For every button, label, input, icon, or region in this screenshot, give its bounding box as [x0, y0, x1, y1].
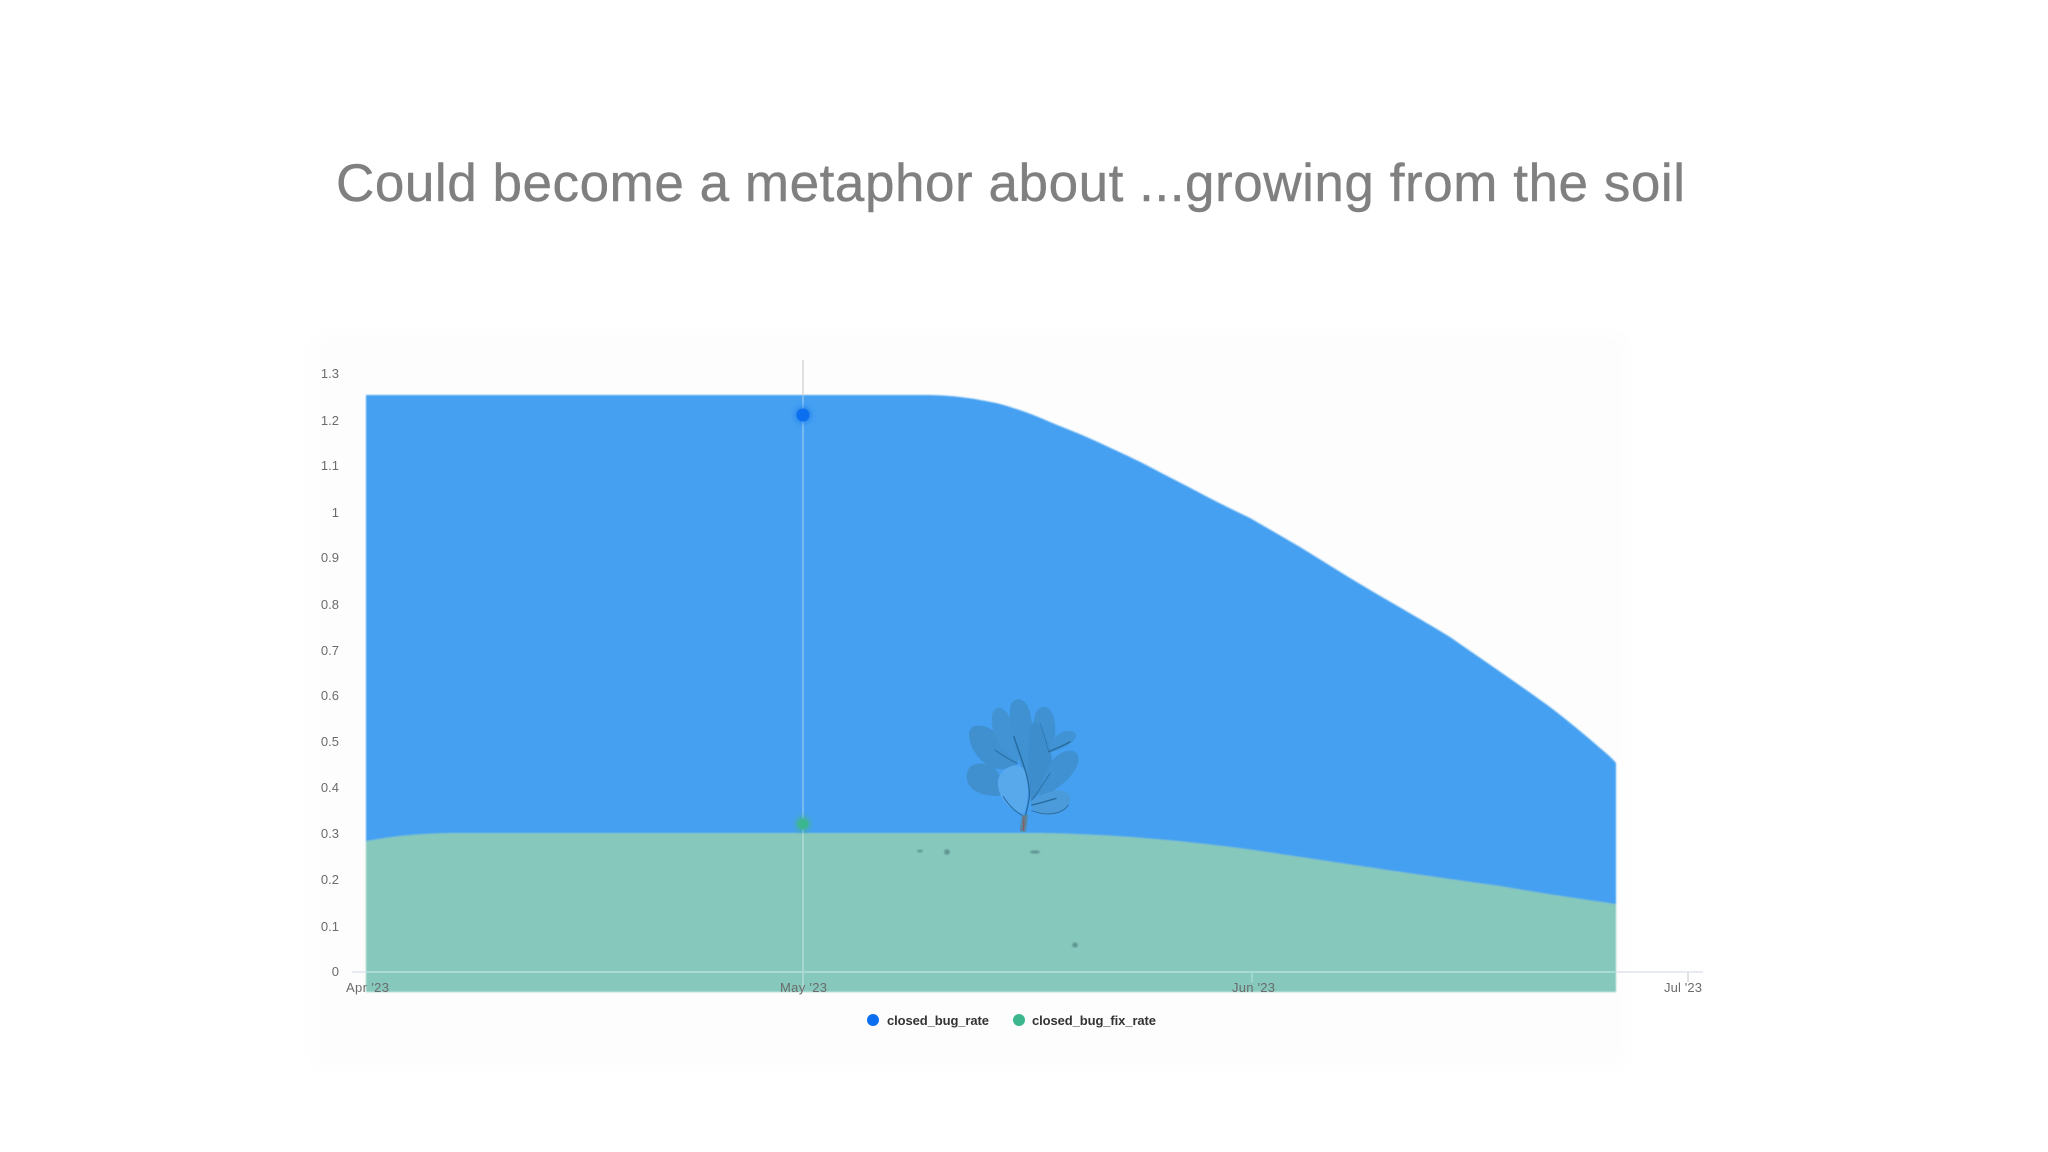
y axis labels: 1.1 — [321, 458, 339, 473]
chart: stacked area — [366, 395, 1616, 992]
marker: closed_bug_fix_rate — [795, 816, 811, 832]
x axis labels: May '23 — [780, 980, 827, 995]
panel: chart — [312, 334, 1703, 1068]
soil specks — [917, 849, 1078, 948]
y axis labels: 1 — [332, 505, 339, 520]
y axis labels: 1.2 — [321, 413, 339, 428]
y axis labels — [321, 366, 339, 979]
panel background — [312, 334, 1626, 1068]
legend — [867, 1013, 1156, 1028]
title: Could become a metaphor about ...growing from the soil — [336, 154, 1685, 213]
hover line: May — [802, 360, 804, 992]
x axis labels: Apr '23 — [346, 980, 389, 995]
x axis labels: Jun '23 — [1232, 980, 1275, 995]
marker: closed_bug_rate — [794, 406, 812, 424]
x axis labels — [346, 980, 1702, 995]
legend item: closed_bug_rate: closed_bug_rate — [887, 1013, 989, 1028]
area: closed_bug_fix_rate — [366, 833, 1616, 992]
y axis labels: 0.6 — [321, 688, 339, 703]
y axis labels: 1.3 — [321, 366, 339, 381]
icon: tree — [967, 699, 1079, 832]
legend item: closed_bug_fix_rate: closed_bug_fix_rate — [1032, 1013, 1156, 1028]
y axis labels: 0 — [332, 964, 339, 979]
y axis labels: 0.9 — [321, 550, 339, 565]
area: closed_bug_rate — [366, 395, 1616, 905]
y axis labels: 0.8 — [321, 597, 339, 612]
y axis labels: 0.7 — [321, 643, 339, 658]
y axis labels: 0.2 — [321, 872, 339, 887]
y axis labels: 0.5 — [321, 734, 339, 749]
x axis line — [352, 972, 1703, 982]
y axis labels: 0.3 — [321, 826, 339, 841]
y axis labels: 0.1 — [321, 919, 339, 934]
x axis labels: Jul '23 — [1664, 980, 1702, 995]
y axis labels: 0.4 — [321, 780, 339, 795]
